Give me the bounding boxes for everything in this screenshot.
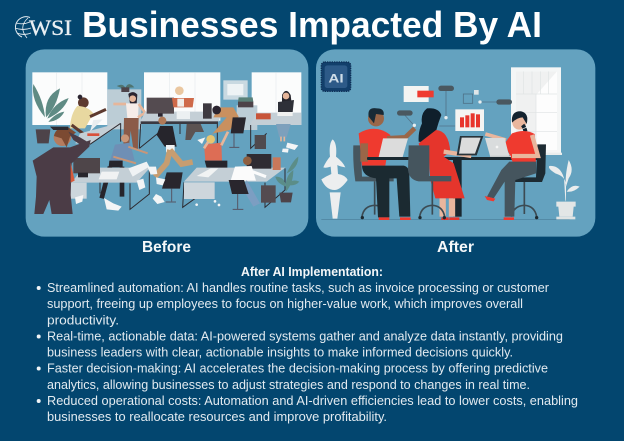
panel: after illustration [316, 49, 595, 237]
stressed woman [197, 132, 228, 168]
AI chip icon [321, 62, 351, 91]
table [367, 157, 539, 217]
filing cabinets [107, 89, 257, 130]
bullet: reduced operational costs [37, 393, 578, 424]
bullet: faster decision-making: analytics, allowing businesses to adjust strategies and respond to changes in real time. [47, 377, 530, 392]
section heading: After AI Implementation: [241, 264, 383, 279]
desk: right back [251, 111, 301, 149]
running man [155, 117, 193, 177]
floor line [321, 218, 570, 221]
tablet [457, 136, 483, 155]
desk: front left of woman [75, 119, 121, 144]
scattered papers [75, 143, 298, 211]
plant: large left [33, 84, 69, 143]
person: man in red shirt [359, 108, 415, 220]
plant on cabinet right [238, 97, 253, 107]
plant on cabinet [117, 84, 134, 92]
laptop: left [379, 138, 408, 157]
windows [32, 72, 301, 125]
desk: front right [183, 154, 285, 207]
window [509, 67, 562, 155]
worker: woman in yellow [70, 95, 106, 135]
logo: WSI globe: WSI [29, 15, 72, 40]
wall picture [223, 80, 248, 100]
AI chip icon: AI [328, 72, 344, 86]
plant: white right [549, 160, 580, 219]
worker: woman at right desk [276, 91, 294, 141]
bullet: streamlined automation: Streamlined automation: AI handles routine tasks, such as invoice processing or customer [47, 280, 550, 295]
desk: centre back [139, 98, 223, 148]
bullet: faster decision-making: Faster decision-making: AI accelerates the decision-making process by offering predictive [47, 360, 548, 376]
floating UI: card [404, 86, 434, 102]
plant: white left [321, 139, 348, 219]
label: After: After [437, 239, 474, 256]
bullet: streamlined automation: productivity. [47, 312, 119, 328]
desk: front centre [70, 158, 150, 209]
bullet: real-time data: business leaders with clear, actionable insights to make informed decisions quickly. [47, 344, 513, 360]
floating UI: connectors [397, 86, 512, 127]
chair: centre [408, 145, 451, 219]
chair: left [353, 145, 394, 219]
person: woman from behind [419, 108, 471, 220]
chair: right [511, 144, 546, 219]
worker: woman in floral top [113, 92, 145, 149]
worker: sleeping man [209, 106, 246, 147]
bullet: faster decision-making [37, 360, 548, 392]
bullet: streamlined automation [37, 280, 550, 328]
plant: right [275, 157, 299, 202]
bullet: real-time data: Real-time, actionable data: AI-powered systems gather and analyze data instantly, providing [47, 328, 563, 344]
floating UI: bar chart [455, 109, 484, 131]
laptop: right [485, 138, 511, 157]
panel: before illustration [26, 49, 308, 237]
bullet: reduced operational costs: Reduced operational costs: Automation and AI-driven efficiencies lead to lower costs, enabling [47, 393, 578, 408]
label: Before: Before [142, 239, 191, 256]
worker: man in white shirt [229, 156, 266, 209]
person: woman in red with braid [485, 111, 538, 220]
man leaning on desk [102, 134, 148, 198]
chair: centre [162, 172, 183, 202]
main figure: boss in suit [33, 127, 91, 214]
bullet: streamlined automation: support, freeing up employees to focus on higher-value work, which improves overall [47, 296, 523, 311]
bullet: reduced operational costs: businesses to reallocate resources and improve profitability. [47, 409, 387, 424]
title: Businesses Impacted By AI [82, 4, 542, 45]
worker: man on phone [172, 86, 204, 140]
bullet: real-time data [37, 328, 563, 360]
